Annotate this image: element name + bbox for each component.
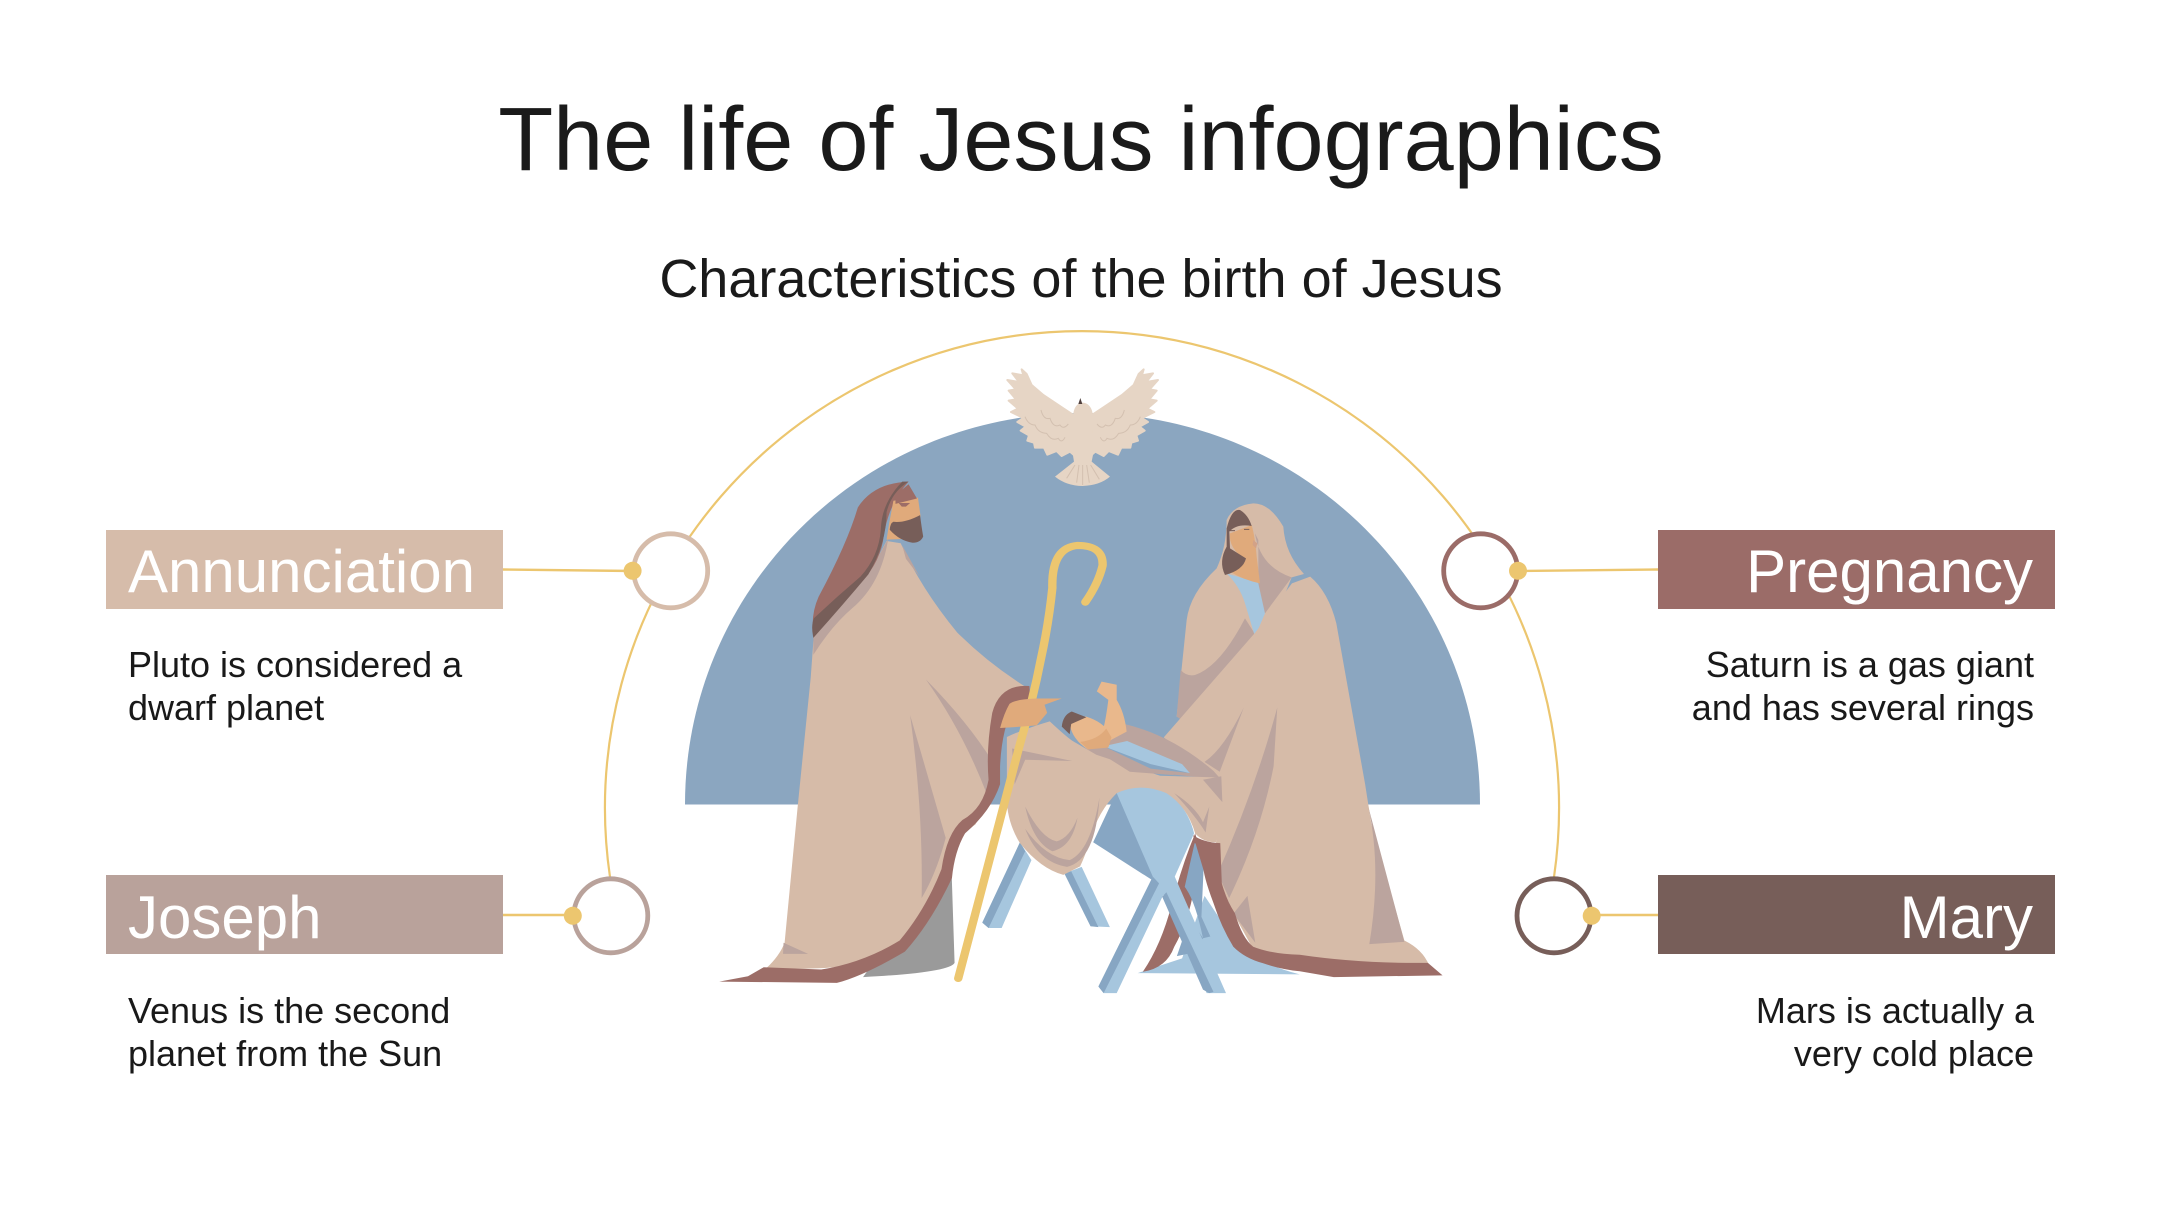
text: Joseph description: planet from the Sun: [128, 1033, 442, 1074]
node: Annunciation: [624, 534, 708, 608]
icon: dove: [1007, 369, 1158, 486]
panel: Pregnancy: [1658, 530, 2055, 609]
nativity illustration: [719, 482, 1443, 993]
manger front: [1098, 785, 1226, 993]
panel: Pregnancy: Pregnancy: [1746, 538, 2033, 605]
text: Annunciation description: dwarf planet: [128, 687, 324, 728]
Joseph head: [887, 498, 921, 540]
Joseph under-robe: [863, 851, 955, 977]
Mary lower garments: [1138, 833, 1300, 974]
connector: Mary: [1592, 914, 1658, 916]
text: Joseph description: Venus is the second: [128, 990, 450, 1031]
panel: Annunciation: Annunciation: [128, 538, 475, 605]
Mary main robe: [1164, 577, 1443, 977]
connector: Annunciation: [503, 570, 633, 571]
text: Pregnancy description: and has several rings: [1692, 687, 2034, 728]
figure: Mary: [1138, 503, 1443, 977]
text: Mary description: Mars is actually a: [1756, 990, 2035, 1031]
Joseph robe: [766, 541, 1028, 969]
title: The life of Jesus infographics: [498, 90, 1664, 190]
Joseph hand: [1000, 699, 1062, 728]
figure: Joseph: [719, 482, 1030, 983]
node: Joseph: [564, 879, 648, 953]
panel: Mary: Mary: [1900, 884, 2033, 951]
gold arc: [605, 331, 1559, 877]
text: Annunciation description: Pluto is considered a: [128, 644, 463, 685]
draped cloth: [1007, 721, 1222, 875]
shepherd staff: [958, 545, 1103, 978]
panel: Mary: [1658, 875, 2055, 954]
Mary upper: hood and face: [1177, 503, 1304, 723]
baby: [1062, 682, 1190, 773]
panel: Joseph: Joseph: [128, 884, 321, 951]
panel: Joseph: [106, 875, 503, 954]
text: Mary description: very cold place: [1794, 1033, 2034, 1074]
node: Mary: [1517, 879, 1601, 953]
node: Pregnancy: [1444, 534, 1527, 608]
manger back: [982, 789, 1177, 928]
Joseph trim: [719, 686, 1030, 983]
blue dome: [685, 413, 1480, 804]
Joseph hood: [813, 482, 909, 632]
connector: Joseph: [503, 914, 573, 916]
subtitle: Characteristics of the birth of Jesus: [659, 249, 1503, 309]
connector: Pregnancy: [1518, 570, 1658, 571]
text: Pregnancy description: Saturn is a gas giant: [1706, 644, 2034, 685]
